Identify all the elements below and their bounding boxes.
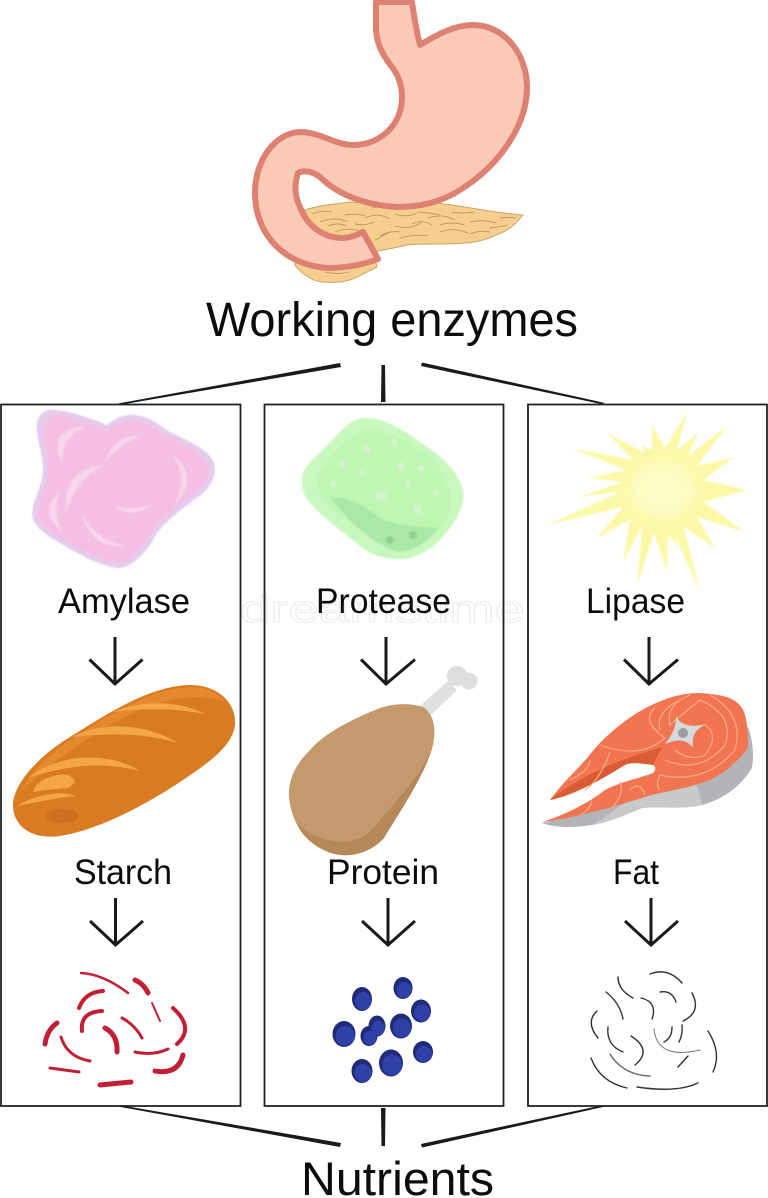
connectors: top xyxy=(118,362,605,404)
icon: protease blob xyxy=(302,418,463,559)
connectors: bottom xyxy=(118,1106,605,1148)
label: Fat: Fat xyxy=(613,853,659,892)
arrow xyxy=(90,898,143,945)
panel: protease column xyxy=(264,404,504,1106)
arrow xyxy=(624,637,678,684)
panel: lipase column xyxy=(528,404,767,1106)
title: Working enzymes xyxy=(206,294,578,347)
icon: chicken leg xyxy=(289,666,478,855)
watermark: dreamstime xyxy=(240,589,525,631)
icon: salmon steak xyxy=(542,693,753,827)
arrow xyxy=(362,898,415,945)
arrow xyxy=(361,637,415,684)
label: Starch: Starch xyxy=(74,853,172,892)
label: Lipase: Lipase xyxy=(586,582,685,621)
arrow xyxy=(625,898,678,945)
icon: fat strands xyxy=(591,972,717,1089)
label: Amylase: Amylase xyxy=(58,582,190,621)
icon: lipase burst xyxy=(547,412,747,592)
icon: bread xyxy=(13,685,235,837)
label: Protease: Protease xyxy=(316,582,451,621)
icon: pancreas xyxy=(295,202,523,282)
icon: starch fragments xyxy=(45,973,185,1085)
icon: stomach xyxy=(255,2,527,268)
arrow xyxy=(90,637,142,684)
icon: protein dots xyxy=(332,977,433,1083)
label: Protein: Protein xyxy=(327,853,439,892)
panel: amylase column xyxy=(1,404,240,1106)
icon: amylase blob xyxy=(32,410,215,568)
